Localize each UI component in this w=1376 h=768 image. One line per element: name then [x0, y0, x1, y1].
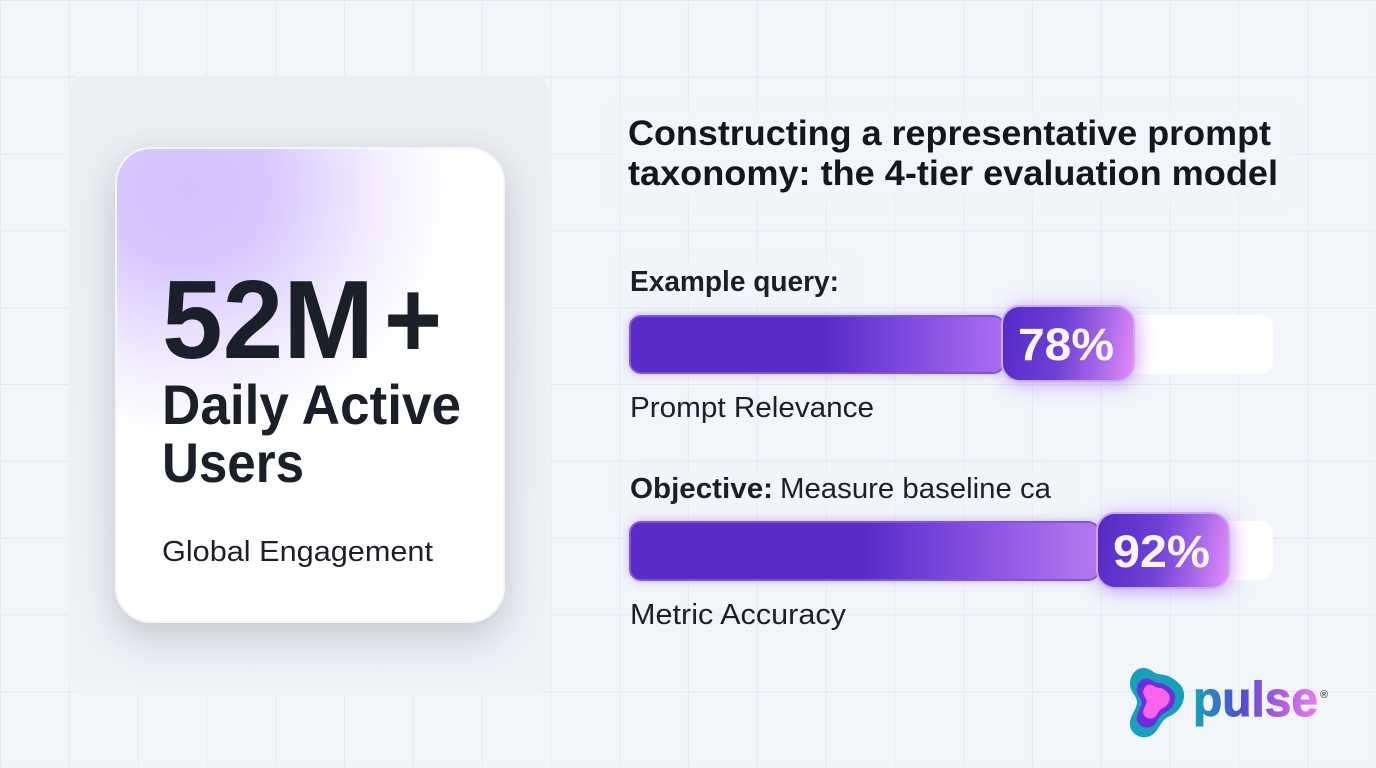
label: metric accuracy: Metric Accuracy — [630, 599, 847, 631]
stat label: Users — [162, 431, 304, 494]
big number: 52M — [162, 258, 374, 382]
big number: + — [384, 258, 442, 382]
panel: stat backdrop — [68, 75, 550, 695]
label: objective — [630, 473, 1052, 505]
bar fill: metric accuracy 92% — [629, 521, 1100, 581]
label: objective: Objective: — [630, 473, 773, 505]
bar track: prompt relevance — [629, 315, 1273, 374]
title — [628, 114, 1278, 193]
label: objective: Measure baseline ca — [780, 473, 1052, 505]
panel: stat card — [115, 147, 505, 623]
label: example query: Example query: — [630, 266, 839, 298]
wordmark: pulse — [1193, 673, 1318, 727]
title: taxonomy: the 4-tier evaluation model — [628, 154, 1278, 193]
badge: 92% — [1096, 512, 1230, 589]
badge: 78% — [1001, 305, 1135, 382]
bar track: metric accuracy — [629, 521, 1273, 580]
bar fill: prompt relevance 78% — [629, 315, 1005, 374]
stat caption: Global Engagement — [162, 536, 433, 568]
registered mark: ® — [1320, 689, 1328, 701]
value: 92%: 92% — [1113, 526, 1210, 577]
value: 78%: 78% — [1018, 319, 1114, 370]
logo: pulse — [1130, 668, 1328, 737]
title: Constructing a representative prompt — [628, 114, 1271, 153]
label: prompt relevance: Prompt Relevance — [630, 392, 874, 424]
stat label — [162, 373, 461, 494]
icon: pulse mark — [1130, 668, 1184, 737]
stat label: Daily Active — [162, 373, 461, 436]
